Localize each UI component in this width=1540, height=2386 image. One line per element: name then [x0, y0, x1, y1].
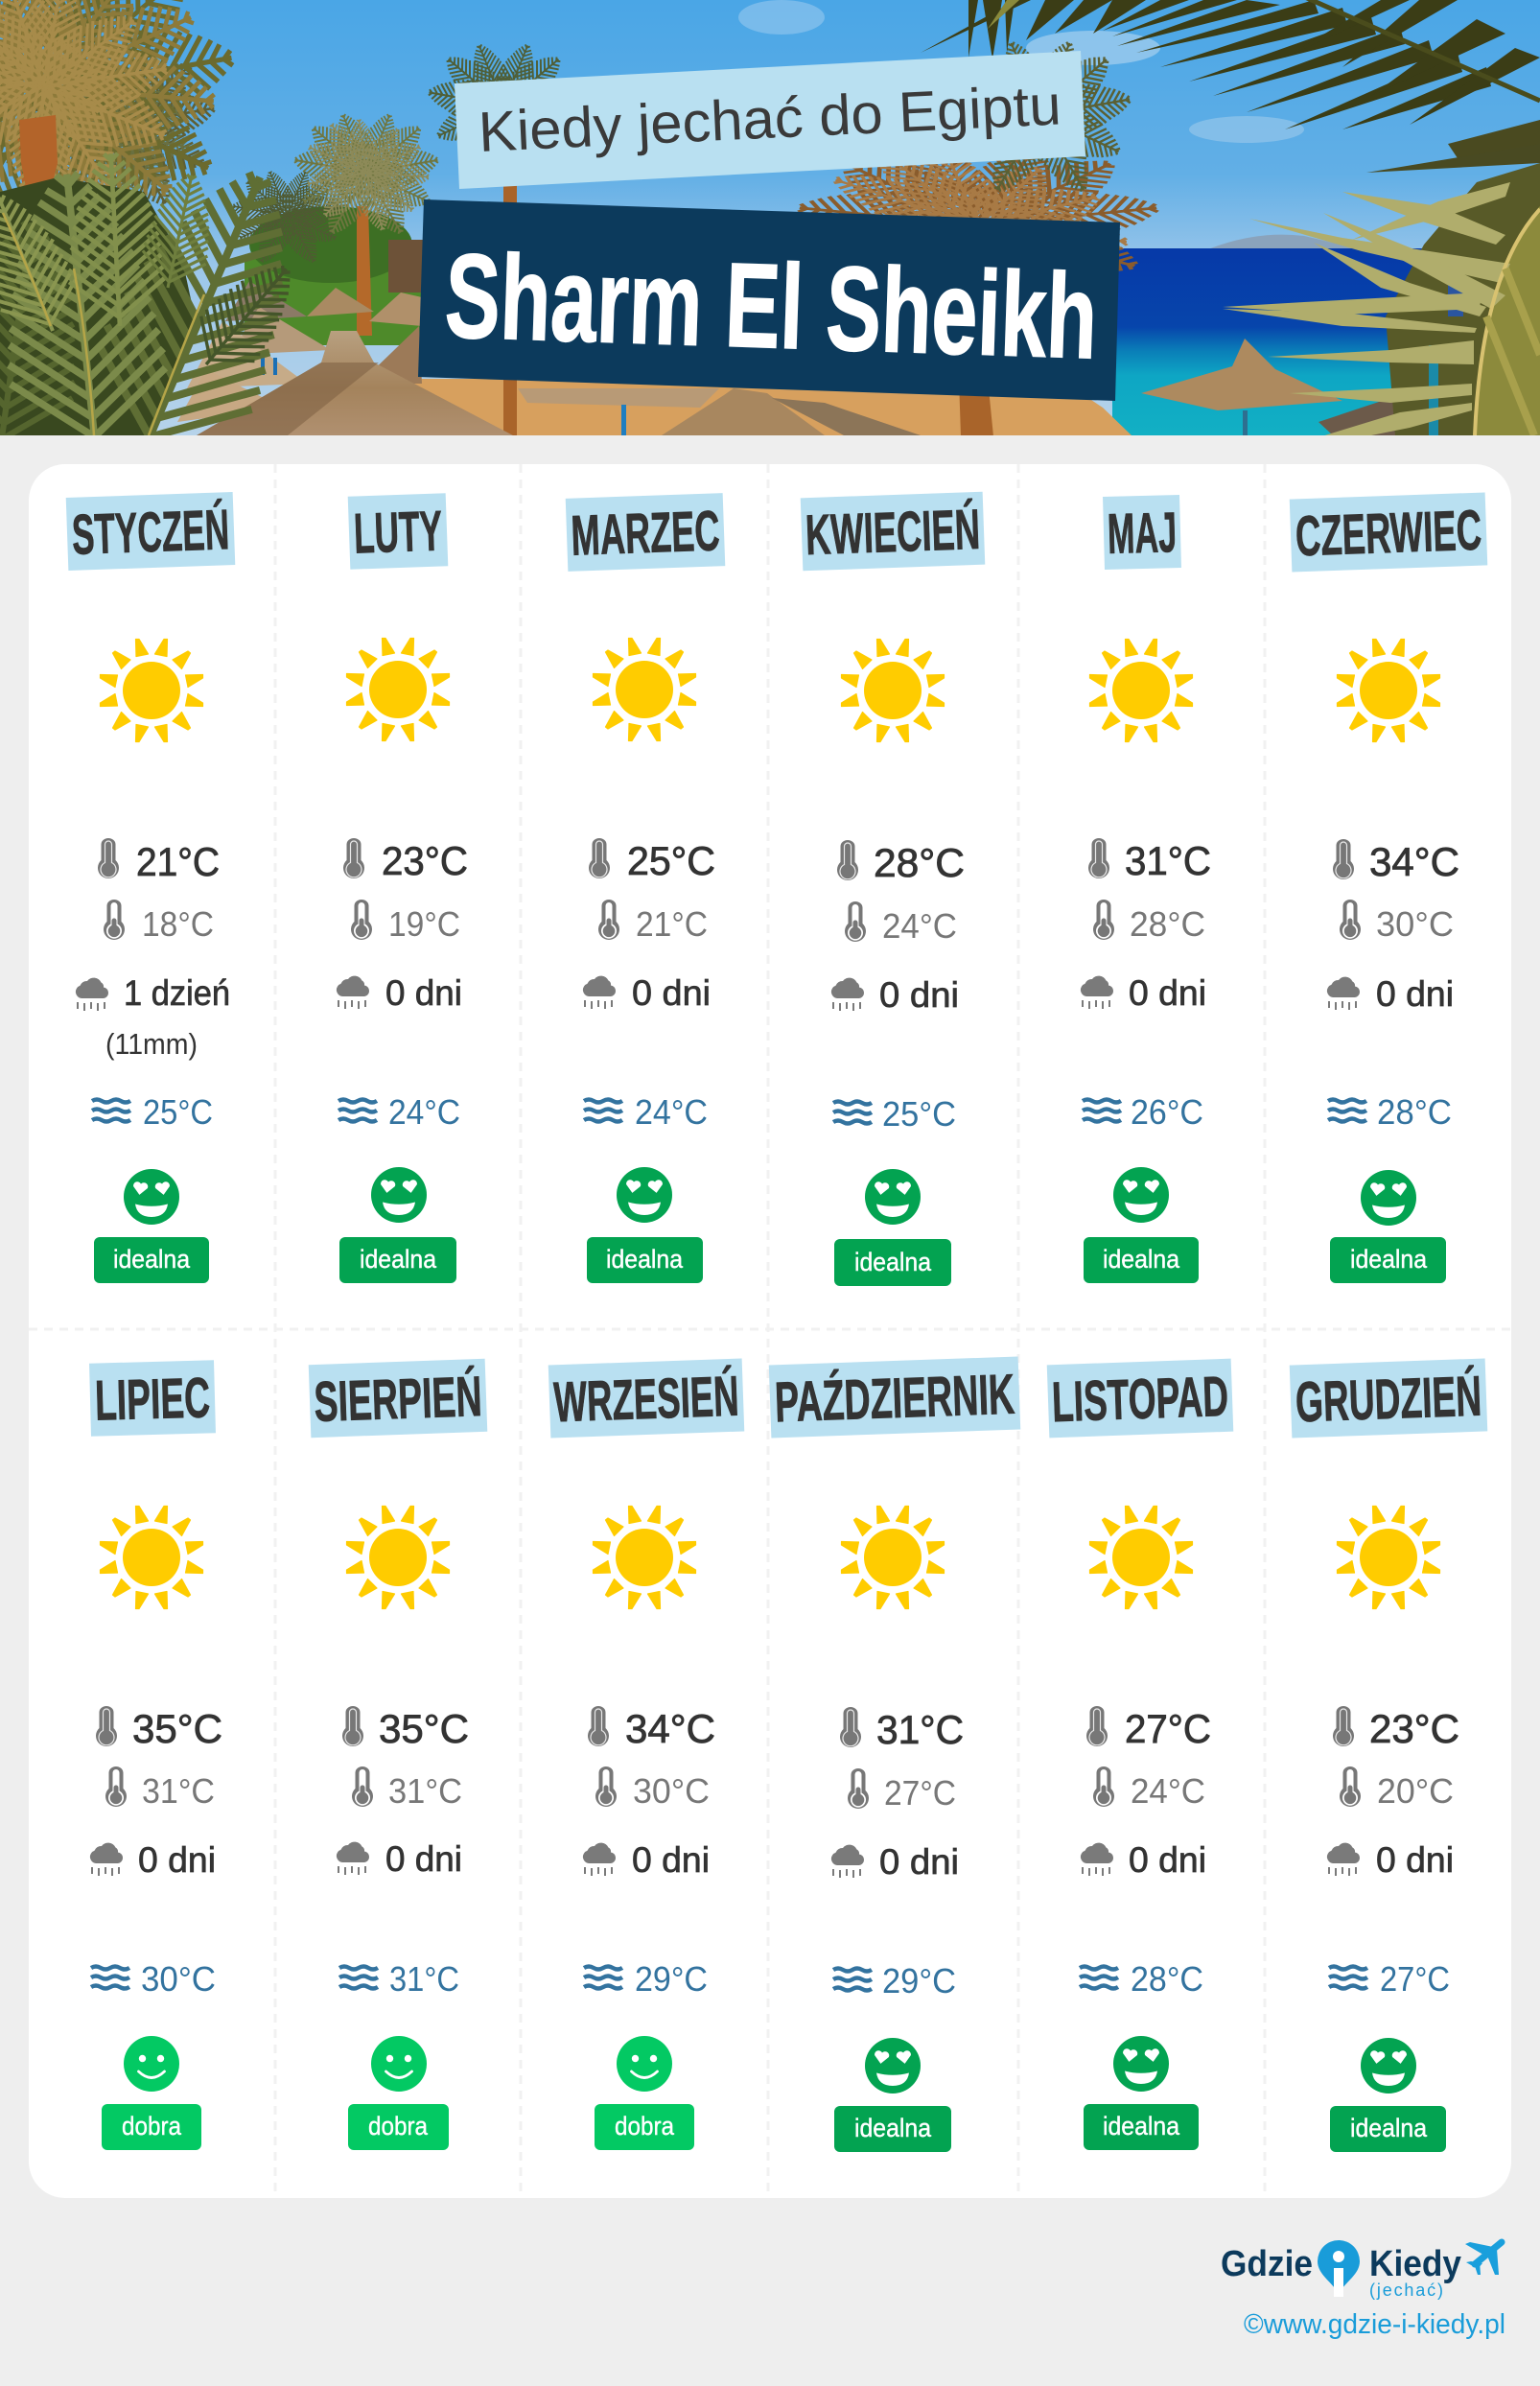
- icon: sun: [347, 639, 449, 740]
- sea temperature: [1080, 1959, 1203, 1999]
- rating badge: idealna: [854, 2114, 932, 2142]
- min temperature: [352, 1766, 462, 1811]
- heading: [1047, 1359, 1233, 1438]
- min temperature: 27°C: [884, 1773, 956, 1813]
- heading: [66, 492, 235, 571]
- sea temperature: 24°C: [388, 1092, 460, 1132]
- max temperature: [343, 838, 468, 883]
- month: październik: [769, 1356, 1020, 2152]
- logo: Gdzie i Kiedy (jechać): Kiedy: [1369, 2244, 1461, 2284]
- rating badge: idealna: [606, 1245, 684, 1274]
- min temperature: 18°C: [142, 904, 214, 944]
- rating badge: [834, 1239, 951, 1286]
- top-right dark palm fronds: [921, 0, 1540, 129]
- subtitle banner: [455, 51, 1085, 189]
- rain days: [1327, 974, 1454, 1014]
- sea temperature: [338, 1092, 460, 1132]
- rain days: [337, 1839, 462, 1879]
- heading: LUTY: [353, 499, 443, 566]
- rating badge: [1084, 1237, 1199, 1283]
- max temperature: [98, 838, 220, 884]
- heading: LIPIEC: [94, 1366, 211, 1433]
- sea temperature: [1328, 1092, 1452, 1132]
- rain days: [337, 973, 462, 1013]
- heading: [348, 493, 448, 570]
- rating badge: idealna: [1103, 2112, 1180, 2140]
- rating badge: [94, 1237, 209, 1283]
- rain days: 0 dni: [632, 1840, 710, 1880]
- month: styczeń: [66, 492, 235, 1283]
- icon: sun: [1089, 1506, 1193, 1609]
- sea temperature: 28°C: [1131, 1959, 1203, 1999]
- rating badge: idealna: [854, 1248, 932, 1276]
- max temperature: 25°C: [627, 838, 715, 883]
- rating badge: [834, 2106, 951, 2152]
- heading: [566, 493, 725, 572]
- min temperature: [598, 900, 708, 944]
- right olive palm frond: [1386, 163, 1540, 435]
- rating badge: [1084, 2104, 1199, 2150]
- min temperature: [1093, 1766, 1205, 1811]
- sea temperature: [584, 1092, 708, 1132]
- sea temperature: 27°C: [1380, 1959, 1450, 1999]
- rating face: [1361, 2038, 1416, 2094]
- rating badge: idealna: [1103, 1245, 1180, 1274]
- month: kwiecień: [801, 492, 985, 1286]
- sea temperature: 26°C: [1131, 1092, 1203, 1132]
- max temperature: 21°C: [136, 839, 220, 884]
- min temperature: 31°C: [388, 1771, 462, 1811]
- icon: location pin: [1318, 2240, 1360, 2297]
- rain days: [90, 1840, 216, 1880]
- rating badge: dobra: [368, 2112, 429, 2140]
- max temperature: 23°C: [1369, 1706, 1459, 1751]
- rain days: 0 dni: [1376, 1840, 1454, 1880]
- rating badge: [587, 1237, 703, 1283]
- month: sierpień: [309, 1359, 487, 2150]
- rating face: [1361, 1170, 1416, 1226]
- max temperature: 31°C: [1125, 838, 1211, 883]
- sea temperature: 24°C: [635, 1092, 708, 1132]
- rain days: [1081, 973, 1206, 1013]
- heading: [801, 492, 985, 571]
- rating badge: [339, 1237, 456, 1283]
- month: listopad: [1047, 1359, 1233, 2150]
- max temperature: [589, 838, 715, 883]
- min temperature: 24°C: [882, 906, 957, 946]
- max temperature: 35°C: [379, 1706, 469, 1751]
- sea temperature: [833, 1961, 956, 2000]
- rating badge: idealna: [1350, 1245, 1428, 1274]
- rating face: [124, 1169, 179, 1225]
- min temperature: 31°C: [142, 1771, 215, 1811]
- month: maj: [1081, 495, 1211, 1283]
- rain days: 0 dni: [1129, 1840, 1206, 1880]
- min temperature: [1093, 900, 1205, 944]
- logo: Gdzie i Kiedy (jechać): [1221, 2240, 1502, 2300]
- rain days: [1081, 1840, 1206, 1880]
- rain days: 0 dni: [1129, 973, 1206, 1013]
- max temperature: [1088, 838, 1211, 883]
- icon: sun: [593, 1506, 696, 1609]
- rating badge: dobra: [122, 2112, 182, 2140]
- icon: plane: [1465, 2242, 1502, 2275]
- max temperature: 31°C: [876, 1707, 964, 1752]
- umbrellas: [225, 281, 307, 321]
- rating face: [371, 1167, 427, 1223]
- min temperature: 28°C: [1130, 904, 1205, 944]
- rating badge: idealna: [360, 1245, 437, 1274]
- rating badge: [348, 2104, 449, 2150]
- min temperature: [1340, 1766, 1454, 1811]
- rating face: [617, 1167, 672, 1223]
- hero photo: beach with palms: [0, 0, 1540, 483]
- rain days: [76, 973, 230, 1013]
- heading: STYCZEŃ: [71, 498, 230, 567]
- logo: Gdzie i Kiedy (jechać): (jechać): [1369, 2281, 1443, 2300]
- title banner: Sharm El Sheikh: [443, 229, 1099, 385]
- rain days: [583, 973, 711, 1013]
- sea temperature: 30°C: [141, 1959, 216, 1999]
- rain days: 0 dni: [632, 973, 711, 1013]
- sea temperature: [91, 1959, 216, 1999]
- rating face: [124, 2036, 179, 2092]
- min temperature: 19°C: [388, 904, 460, 944]
- min temperature: [104, 900, 214, 944]
- rating face: [865, 2038, 921, 2094]
- rain days: [831, 1842, 959, 1882]
- sea temperature: 28°C: [1377, 1092, 1452, 1132]
- rating badge: dobra: [615, 2112, 675, 2140]
- heading: [89, 1360, 216, 1437]
- sea temperature: 29°C: [882, 1961, 956, 2000]
- sea temperature: [339, 1959, 459, 1999]
- max temperature: [840, 1707, 964, 1752]
- sea temperature: 29°C: [635, 1959, 708, 1999]
- left plant fronds: [0, 177, 197, 435]
- rain days: 0 dni: [138, 1840, 216, 1880]
- sea temperature: 25°C: [882, 1094, 956, 1134]
- sea temperature: [92, 1092, 213, 1132]
- min temperature: [1340, 900, 1454, 944]
- sea temperature: [584, 1959, 708, 1999]
- min temperature: [105, 1766, 215, 1811]
- title banner: [418, 199, 1120, 401]
- rating badge: [1330, 1237, 1446, 1283]
- rating face: [371, 2036, 427, 2092]
- top-left palm: [15, 119, 58, 186]
- max temperature: 28°C: [874, 840, 965, 885]
- panel: months grid: [29, 464, 1511, 2198]
- max temperature: 27°C: [1125, 1706, 1211, 1751]
- heading: WRZESIEŃ: [552, 1365, 740, 1434]
- sea temperature: 31°C: [389, 1959, 459, 1999]
- rating badge: [102, 2104, 201, 2150]
- rain days: [583, 1840, 710, 1880]
- rating face: [865, 1169, 921, 1225]
- website credit: ©www.gdzie-i-kiedy.pl: [1244, 2309, 1505, 2340]
- rain days: 0 dni: [879, 975, 959, 1015]
- subtitle banner: Kiedy jechać do Egiptu: [478, 73, 1062, 164]
- rating face: [1113, 1167, 1169, 1223]
- icon: sun: [1089, 639, 1193, 742]
- min temperature: 30°C: [633, 1771, 710, 1811]
- month: grudzień: [1290, 1358, 1487, 2152]
- min temperature: [848, 1768, 956, 1813]
- min temperature: 21°C: [636, 904, 708, 944]
- icon: sun: [347, 1506, 449, 1609]
- heading: MARZEC: [570, 499, 721, 568]
- month: lipiec: [89, 1360, 222, 2150]
- rating face: [617, 2036, 672, 2092]
- icon: sun: [842, 639, 944, 742]
- rain days: [831, 975, 959, 1015]
- min temperature: 20°C: [1377, 1771, 1454, 1811]
- heading: [769, 1356, 1020, 1439]
- max temperature: 34°C: [625, 1706, 715, 1751]
- rain days: 1 dzień: [124, 973, 230, 1013]
- sea temperature: [833, 1094, 956, 1134]
- icon: sun: [593, 639, 696, 740]
- heading: [1103, 495, 1181, 570]
- sea temperature: [1083, 1092, 1203, 1132]
- icon: sun: [100, 1506, 203, 1609]
- rating badge: idealna: [113, 1245, 191, 1274]
- min temperature: 24°C: [1131, 1771, 1205, 1811]
- heading: SIERPIEŃ: [313, 1365, 483, 1434]
- heading: [548, 1358, 744, 1439]
- icon: sun: [1337, 1506, 1440, 1609]
- rating badge: idealna: [1350, 2114, 1428, 2142]
- rating badge: [1330, 2106, 1446, 2152]
- rain days: 0 dni: [385, 1839, 462, 1879]
- min temperature: [845, 901, 957, 946]
- rating badge: [595, 2104, 694, 2150]
- heading: PAŹDZIERNIK: [774, 1363, 1015, 1434]
- background palms: [245, 259, 422, 345]
- min temperature: [351, 900, 460, 944]
- icon: sun: [1337, 639, 1440, 742]
- month: wrzesień: [548, 1358, 744, 2150]
- max temperature: 34°C: [1369, 839, 1459, 884]
- rating face: [1113, 2036, 1169, 2092]
- rain days: 0 dni: [1376, 974, 1454, 1014]
- max temperature: 35°C: [132, 1706, 222, 1751]
- max temperature: [1086, 1706, 1211, 1751]
- month: czerwiec: [1290, 492, 1487, 1283]
- rain days: [1327, 1840, 1454, 1880]
- sea temperature: [1329, 1959, 1450, 1999]
- logo: Gdzie i Kiedy (jechać): Gdzie: [1221, 2244, 1313, 2284]
- icon: sun: [100, 639, 203, 742]
- rain days: 0 dni: [879, 1842, 959, 1882]
- heading: [309, 1359, 487, 1438]
- month: marzec: [566, 493, 725, 1283]
- heading: KWIECIEŃ: [805, 498, 981, 567]
- month: luty: [337, 493, 468, 1283]
- icon: sun: [842, 1506, 944, 1609]
- rainfall: (11mm): [105, 1027, 198, 1061]
- rain days: 0 dni: [385, 973, 462, 1013]
- min temperature: [595, 1766, 710, 1811]
- heading: MAJ: [1107, 501, 1178, 566]
- max temperature: 23°C: [382, 838, 468, 883]
- heading: LISTOPAD: [1051, 1365, 1229, 1434]
- min temperature: 30°C: [1376, 904, 1454, 944]
- sea temperature: 25°C: [143, 1092, 213, 1132]
